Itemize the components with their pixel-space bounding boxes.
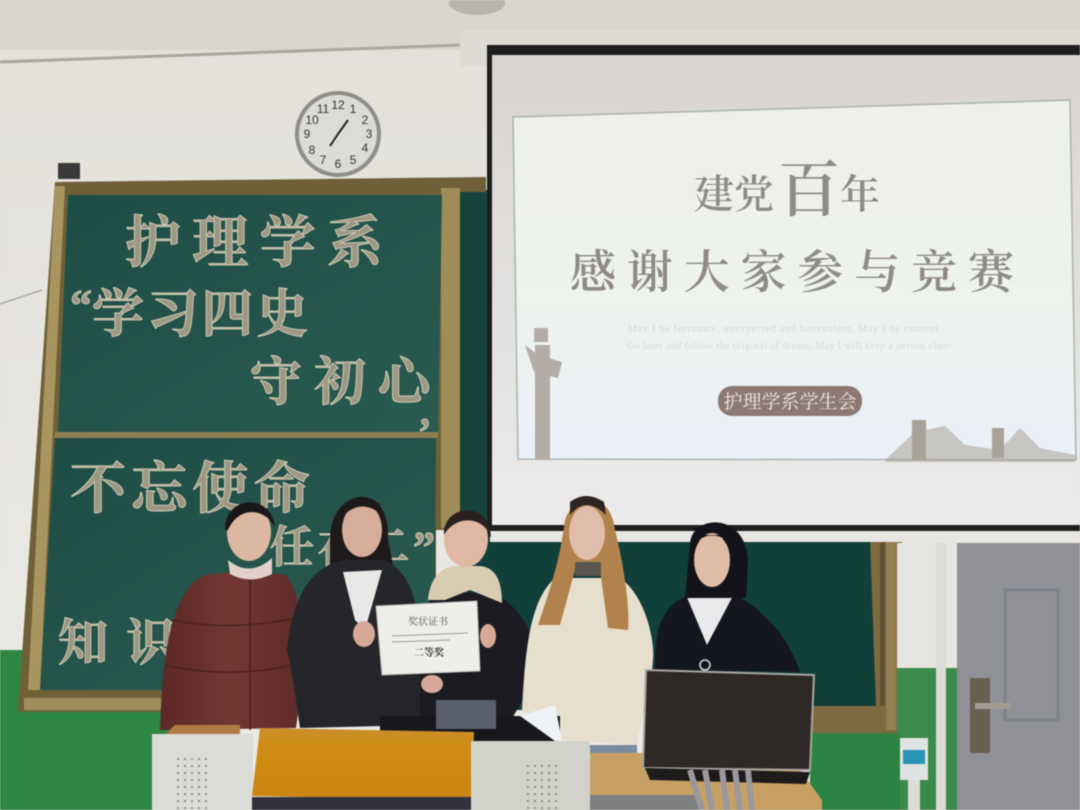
wall clock: 9 <box>304 127 311 141</box>
slide badge: 护理学系学生会 <box>718 386 862 416</box>
slide title: 建党百年 <box>694 157 880 225</box>
wall clock: 7 <box>320 153 327 167</box>
chalk slogan: 守初心: 守初心 <box>250 355 436 412</box>
chalk slogan: 守初心: , <box>420 389 430 434</box>
wall clock: 5 <box>350 153 357 167</box>
person: student with long hair and cream hoodie <box>522 496 653 755</box>
award certificate: 奖状证书 <box>408 615 448 628</box>
wall clock: 8 <box>309 143 316 157</box>
person: teacher in maroon jacket <box>160 502 302 730</box>
slide title: 建党百年: 百 <box>778 157 840 225</box>
wall clock: 6 <box>335 157 342 171</box>
slide panel <box>513 100 1076 462</box>
chalk slogan: 不忘使命: 不忘使命 <box>70 459 310 521</box>
wall clock: 10 <box>305 113 319 127</box>
projector screen <box>487 45 1080 542</box>
podium desk top <box>165 700 822 810</box>
wall clock: 11 <box>317 102 330 116</box>
award certificate <box>353 601 496 693</box>
orange cloth panel <box>252 728 474 810</box>
slide badge: 护理学系学生会: 护理学系学生会 <box>723 391 857 413</box>
slide English subtitle: May I be fortunate, unexpected and benevolent, May I be content <box>628 324 938 335</box>
person: student in black jacket <box>287 497 423 728</box>
right wall strip <box>810 543 957 810</box>
door <box>957 543 1080 810</box>
icon: great wall <box>885 420 1075 462</box>
slide title: 感谢大家参与竞赛: 感谢大家参与竞赛 <box>570 247 1016 298</box>
chalk slogan: 任在: 任在二” <box>270 523 435 572</box>
wall clock: 12 <box>331 98 345 112</box>
wall clock: 3 <box>366 127 373 141</box>
wall clock <box>295 91 381 177</box>
laptop <box>643 670 814 810</box>
award certificate: 二等奖 <box>414 646 444 659</box>
person: student in dark jacket with glasses <box>655 522 800 672</box>
blackboard: lower right green section <box>460 190 902 733</box>
icon: huabiao column <box>525 328 562 460</box>
blackboard: left frame and panels <box>18 177 486 712</box>
slide title: 建党百年: 年 <box>840 172 880 217</box>
slide English subtitle: Go later and follow the original of dream, May I will keep a person cheer <box>627 341 953 352</box>
wall clock: 1 <box>350 102 357 116</box>
podium right cabinet <box>471 741 590 810</box>
wall clock: 2 <box>362 113 369 127</box>
person: student with fur collar <box>420 510 538 722</box>
chalk slogan: 守初心 <box>250 355 436 434</box>
chalk slogan: 学习四史: “ <box>70 281 92 330</box>
slide English subtitle <box>627 324 953 352</box>
chalk slogan: 学习四史: 学习四史 <box>92 287 308 344</box>
wall clock: 4 <box>362 141 369 155</box>
slide title: 建党百年: 建党 <box>694 172 774 217</box>
podium left white cabinet <box>152 734 253 810</box>
chalk heading: 护理学系: 护理学系 <box>125 213 384 275</box>
chalk slogan: 知识: 知识 <box>58 615 180 671</box>
